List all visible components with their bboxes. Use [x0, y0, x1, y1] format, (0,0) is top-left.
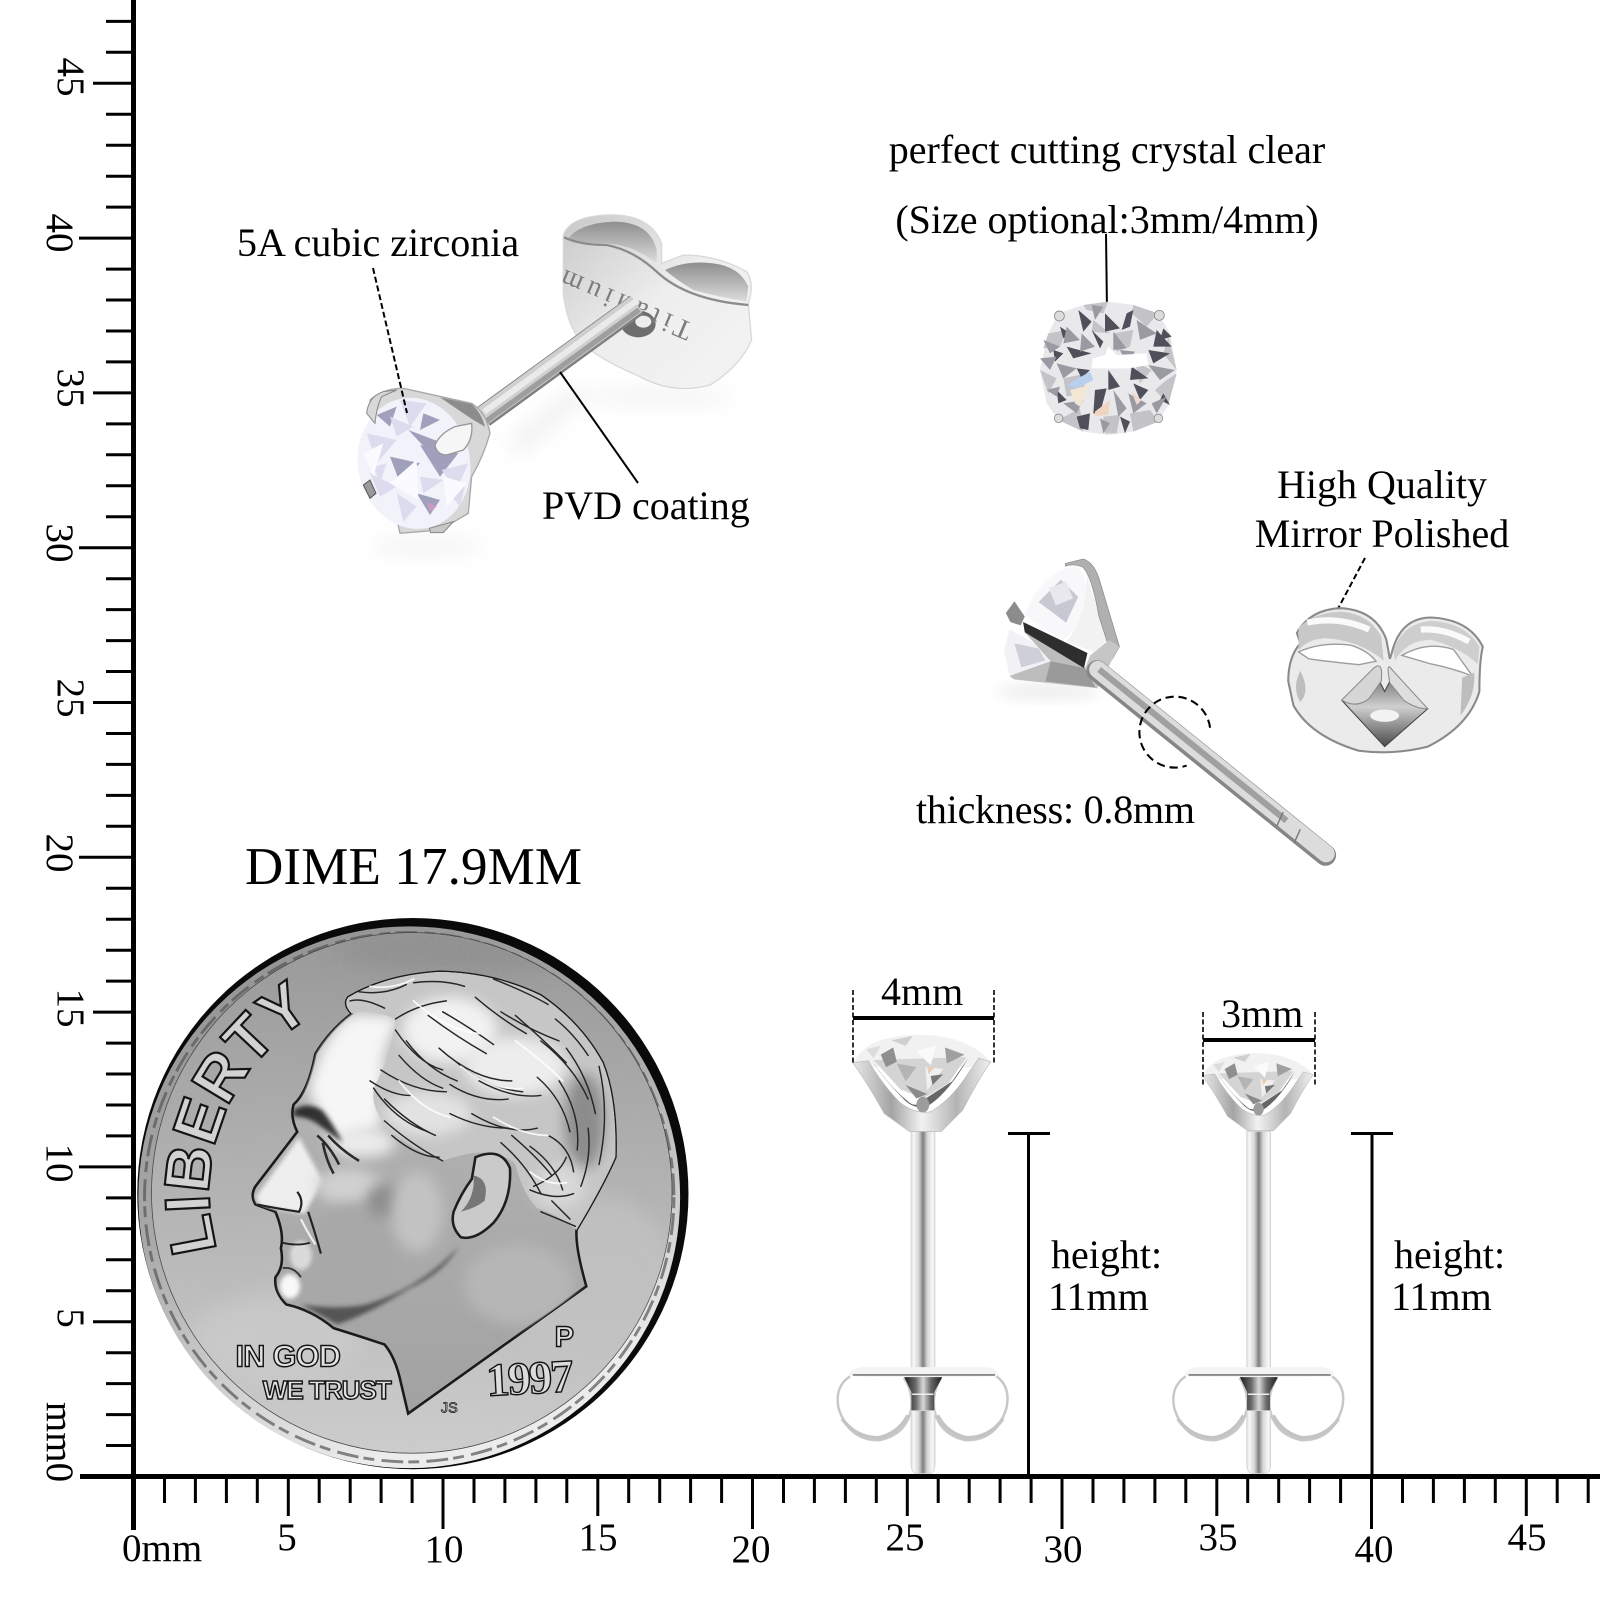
- callout: 5A cubic zirconia: [237, 220, 519, 413]
- dashed thickness circle: [1139, 697, 1210, 768]
- ruler: vertical axis with ticks and labels: 10: [38, 1144, 81, 1182]
- ruler: vertical axis with ticks and labels: mm0: [38, 1402, 81, 1482]
- butterfly clutch: [1288, 608, 1483, 752]
- dark facets: [1053, 310, 1172, 433]
- coin portrait: [253, 972, 616, 1414]
- callout: perfect cutting crystal clear: (Size optional:3mm/4mm): [895, 197, 1319, 242]
- dimension: height 11mm for 3mm stud: [1351, 1134, 1505, 1476]
- dimension: 3mm width: [1203, 991, 1315, 1085]
- dimension: height 11mm for 3mm stud: height:: [1394, 1232, 1505, 1277]
- ruler: horizontal axis with ticks and labels: 40: [1354, 1528, 1394, 1571]
- coin lettering: motto, date, marks: IN GOD: [235, 1339, 341, 1373]
- callout: High Quality Mirror Polished: Mirror Polished: [1255, 511, 1509, 556]
- stud 3mm: stone and cup: [1202, 1053, 1313, 1131]
- ruler: vertical axis with ticks and labels: 35: [49, 368, 92, 408]
- ruler: horizontal axis with ticks and labels: 30: [1044, 1528, 1082, 1571]
- post: [1097, 669, 1326, 855]
- coin lettering: motto, date, marks: [235, 1321, 575, 1416]
- ruler: vertical axis with ticks and labels: 30: [38, 524, 81, 562]
- hair engraving strokes: [350, 979, 604, 1226]
- stud 4mm: stone and cup: [853, 1035, 991, 1131]
- coin lettering: motto, date, marks: JS: [441, 1400, 458, 1416]
- butterfly clutch: [556, 215, 752, 389]
- ruler: horizontal axis with ticks and labels: 5: [277, 1516, 297, 1559]
- soft shadow: [370, 387, 733, 555]
- dime coin illustration: [137, 918, 688, 1470]
- heading: dime size: DIME 17.9MM: [245, 838, 582, 896]
- callout: perfect cutting crystal clear: [889, 127, 1325, 310]
- ruler: horizontal axis with ticks and labels: 10: [424, 1528, 464, 1571]
- cubic zirconia stone: [346, 387, 482, 540]
- callout: 5A cubic zirconia: 5A cubic zirconia: [237, 220, 519, 265]
- prongs: [1054, 310, 1164, 423]
- ruler: horizontal axis with ticks and labels: 25: [886, 1516, 924, 1559]
- ruler: vertical axis with ticks and labels: 40: [38, 214, 81, 252]
- ruler: vertical axis with ticks and labels: [38, 0, 134, 1530]
- stud 4mm: post and back: [838, 1131, 1008, 1474]
- stud 3mm: post and back: [1173, 1131, 1343, 1474]
- prongs: [363, 390, 472, 533]
- ruler: horizontal axis with ticks and labels: 45: [1508, 1516, 1546, 1559]
- dimension: height 11mm for 4mm stud: height:: [1051, 1232, 1162, 1277]
- butterfly clutch: Titanium: [556, 263, 697, 346]
- top-view round cut stone: [1040, 302, 1177, 435]
- ruler: vertical axis with ticks and labels: 45: [49, 58, 92, 96]
- ruler: vertical axis with ticks and labels: 15: [49, 988, 92, 1028]
- post: [483, 300, 639, 421]
- coin lettering: motto, date, marks: P: [555, 1321, 574, 1353]
- shadow: [997, 683, 1101, 700]
- ruler: horizontal axis with ticks and labels: 35: [1198, 1516, 1238, 1559]
- callout: thickness: thickness: 0.8mm: [916, 787, 1195, 832]
- dimension: height 11mm for 3mm stud: 11mm: [1391, 1274, 1492, 1319]
- earring 2: stud side view with separate clutch: [997, 559, 1483, 855]
- ruler: horizontal axis with ticks and labels: [80, 1476, 1600, 1571]
- callout: High Quality Mirror Polished: High Quality: [1277, 462, 1487, 507]
- coin face details: brow, eye, nose, mouth, ear: [257, 1106, 510, 1277]
- coin lettering: motto, date, marks: 1997: [485, 1351, 575, 1407]
- ruler: horizontal axis with ticks and labels: 15: [578, 1516, 618, 1559]
- dimension: 4mm width: 4mm: [881, 969, 963, 1014]
- callout: PVD coating: PVD coating: [542, 483, 750, 528]
- ruler: vertical axis with ticks and labels: 25: [49, 678, 92, 718]
- callout: High Quality Mirror Polished: [1255, 462, 1509, 618]
- callout: PVD coating: [542, 372, 750, 528]
- dimension: 3mm width: 3mm: [1221, 991, 1303, 1036]
- ruler: vertical axis with ticks and labels: 20: [38, 834, 81, 872]
- dimension: 4mm width: [853, 969, 994, 1064]
- callout: perfect cutting crystal clear: perfect cutting crystal clear: [889, 127, 1325, 172]
- ruler: horizontal axis with ticks and labels: 20: [732, 1528, 770, 1571]
- side-view studs with dimensions: [838, 1035, 1343, 1474]
- ruler: vertical axis with ticks and labels: 5: [49, 1308, 92, 1328]
- setting cup and prongs: [1006, 559, 1119, 689]
- dimension: height 11mm for 4mm stud: [1008, 1134, 1162, 1476]
- coin lettering: LIBERTY: LIBERTY: [164, 978, 301, 1256]
- pale facets: [1040, 302, 1177, 433]
- setting cup: [370, 388, 490, 533]
- ruler: horizontal axis with ticks and labels: 0mm: [122, 1527, 202, 1570]
- coin lettering: motto, date, marks: WE TRUST: [263, 1375, 392, 1405]
- earring 1: angled stud with butterfly back: [346, 215, 752, 555]
- stone: [1004, 566, 1087, 674]
- dimension: height 11mm for 4mm stud: 11mm: [1048, 1274, 1149, 1319]
